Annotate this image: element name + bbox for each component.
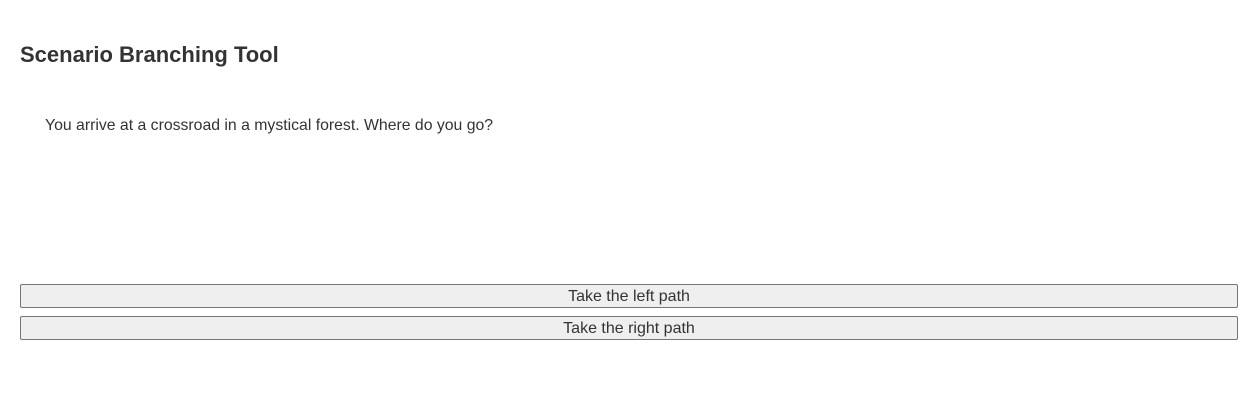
scenario text: You arrive at a crossroad in a mystical forest. Where do you go?: [45, 117, 493, 134]
title: Scenario Branching Tool: [20, 42, 279, 67]
button: left path: [20, 284, 1238, 308]
button: left path: Take the left path: [568, 288, 690, 305]
button: right path: [20, 316, 1238, 340]
button: right path: Take the right path: [563, 320, 695, 337]
